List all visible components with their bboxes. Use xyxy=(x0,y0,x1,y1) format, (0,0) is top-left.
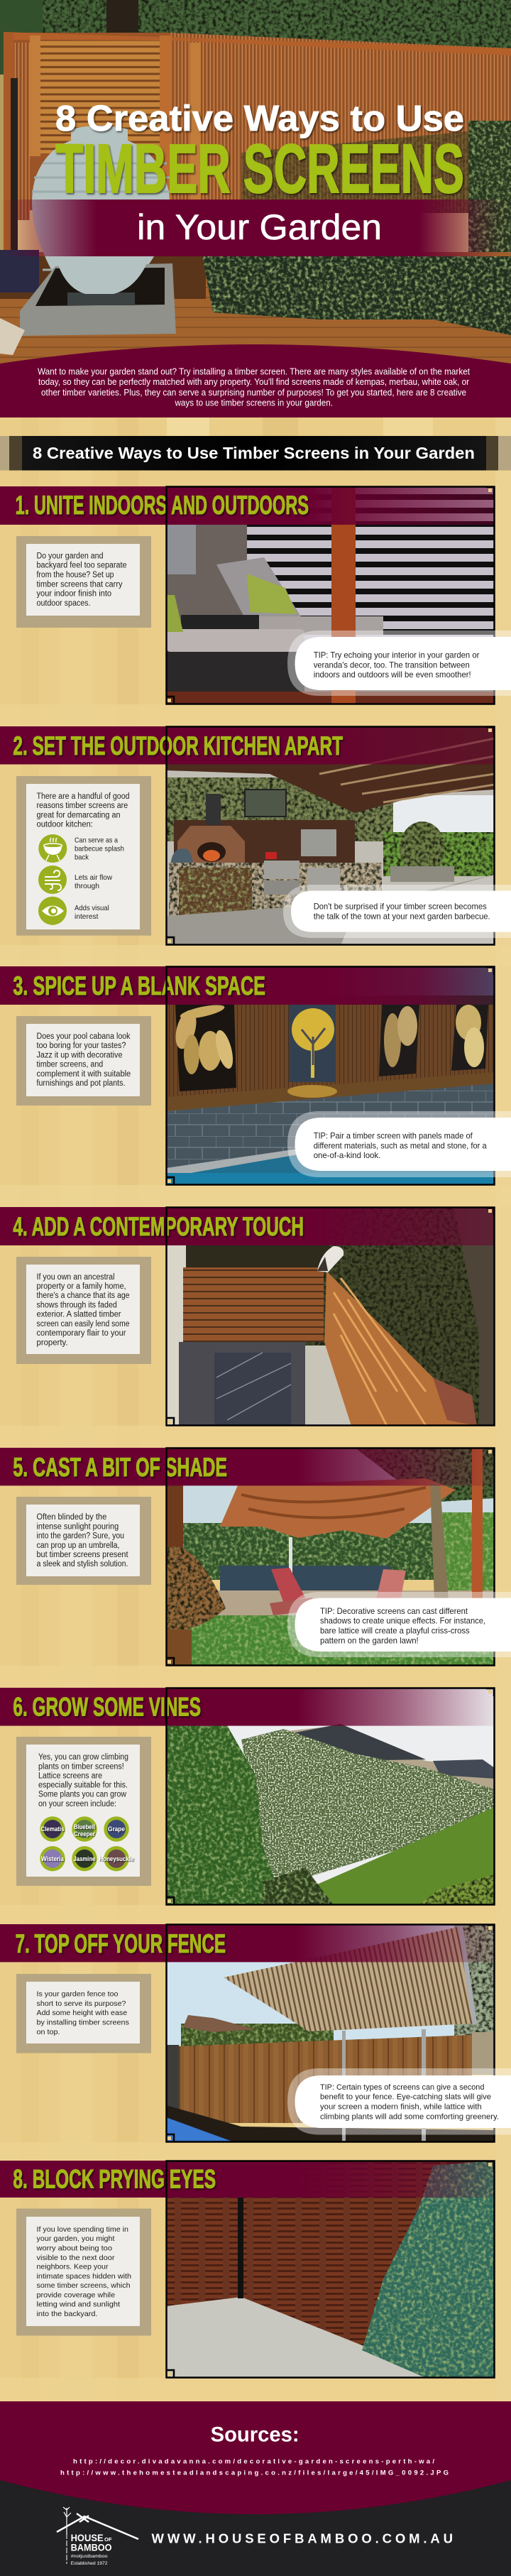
text box: but timber screens present xyxy=(37,1551,128,1559)
logo: house of bamboo xyxy=(57,2507,138,2566)
header band xyxy=(0,1924,495,1962)
text box with icons: There are a handful of good xyxy=(37,792,129,801)
photo frame xyxy=(166,1688,494,1905)
logo: house of bamboo: Established 1972 xyxy=(71,2562,108,2566)
photo frame xyxy=(166,1924,494,2142)
text box: shows through its faded xyxy=(37,1301,117,1309)
tip callout: one-of-a-kind look. xyxy=(314,1150,380,1160)
photo frame xyxy=(166,1207,494,1426)
text box: property. xyxy=(37,1339,68,1348)
text box with plant badges: on your screen include: xyxy=(38,1800,116,1808)
tip callout: climbing plants will add some comforting greenery. xyxy=(320,2113,499,2122)
tip callout xyxy=(287,631,511,696)
badge: bluebell creeper xyxy=(72,1816,97,1842)
text box with icons: Adds visual xyxy=(75,904,109,912)
tip callout xyxy=(287,2068,511,2134)
intro panel: other timber varieties. Plus, they can serve a surprising number of purposes! To get you started, here are 8 creative xyxy=(41,388,466,398)
photo: pergola over fence xyxy=(166,1924,495,2142)
subtitle bar xyxy=(0,436,511,470)
photo: outdoor kitchen xyxy=(166,726,495,945)
text box xyxy=(16,1257,151,1364)
photo frame xyxy=(166,2161,494,2378)
icon: barbecue xyxy=(38,834,67,863)
deck xyxy=(0,252,511,373)
text box: If you love spending time in xyxy=(37,2225,128,2234)
tip callout xyxy=(283,885,511,938)
lower bush xyxy=(202,256,511,335)
text box with plant badges: especially suitable for this. xyxy=(38,1781,128,1790)
header band xyxy=(0,486,495,525)
text box: visible to the next door xyxy=(37,2254,115,2262)
concrete water base xyxy=(20,263,176,336)
tip callout: TIP: Decorative screens can cast different xyxy=(320,1606,468,1616)
text box: Do your garden and xyxy=(37,552,104,560)
text box: timber screens, and xyxy=(37,1061,103,1069)
header band xyxy=(0,726,495,764)
slatted panel xyxy=(4,33,170,210)
text box: property or a family home, xyxy=(37,1282,126,1291)
text box with icons: barbecue splash xyxy=(75,845,124,853)
badge: clematis xyxy=(40,1816,65,1842)
paper xyxy=(0,318,25,355)
heading: 8. BLOCK PRYING EYES xyxy=(13,2164,216,2194)
tip callout xyxy=(287,1592,511,1657)
badge: wisteria: Wisteria xyxy=(41,1855,65,1863)
text box: Add some height with ease xyxy=(37,2009,127,2017)
logo: house of bamboo: #notjustbamboo xyxy=(71,2555,108,2559)
text box with icons: reasons timber screens are xyxy=(37,802,128,810)
bag xyxy=(0,250,39,293)
badge: grape xyxy=(104,1816,129,1842)
text box: provide coverage while xyxy=(37,2291,115,2299)
tip callout: bare lattice will create a playful criss-cross xyxy=(320,1626,470,1636)
sources panel: Sources: xyxy=(211,2423,300,2447)
text box: letting wind and sunlight xyxy=(37,2301,120,2309)
hero photo: timber screen, urn and garden xyxy=(0,0,511,373)
wood background xyxy=(0,412,511,2407)
text box: complement it with suitable xyxy=(37,1070,131,1079)
text box with icons: Can serve as a xyxy=(75,836,118,845)
tip callout: TIP: Certain types of screens can give a second xyxy=(320,2083,484,2092)
subtitle bar: 8 Creative Ways to Use Timber Screens in Your Garden xyxy=(33,444,475,462)
text box with icons: interest xyxy=(75,912,99,921)
text box: there's a chance that its age xyxy=(37,1292,129,1300)
text box: your garden, you might xyxy=(37,2234,115,2243)
sources panel: http://www.thehomesteadlandscaping.co.nz/files/large/45/IMG_0092.JPG xyxy=(60,2469,449,2477)
icon: eye xyxy=(38,897,67,925)
text box xyxy=(16,2208,151,2336)
urn lower in pool xyxy=(58,264,146,294)
photo: jasmine hedge and lawn xyxy=(166,1688,495,1905)
header band xyxy=(0,2161,495,2198)
heading: 4. ADD A CONTEMPORARY TOUCH xyxy=(13,1212,304,1241)
header band xyxy=(0,966,495,1005)
tip callout: different materials, such as metal and stone, for a xyxy=(314,1141,487,1151)
text box: furnishings and pot plants. xyxy=(37,1079,125,1088)
photo frame xyxy=(166,967,494,1185)
text box: Jazz it up with decorative xyxy=(37,1052,122,1060)
text box: exterior. A slatted timber xyxy=(37,1311,121,1319)
section 8: block prying eyes xyxy=(0,2161,495,2378)
section 6: grow some vines xyxy=(0,1688,495,1905)
header band xyxy=(0,1207,495,1245)
text box: some timber screens, which xyxy=(37,2281,131,2290)
badge: grape: Grape xyxy=(108,1825,125,1833)
intro panel xyxy=(0,344,511,417)
section 7: top off your fence xyxy=(0,1924,511,2142)
section 2: set the outdoor kitchen apart xyxy=(0,726,511,945)
text box: backyard feel too separate xyxy=(37,562,126,570)
photo frame xyxy=(166,1448,494,1666)
tip callout: indoors and outdoors will be even smoother! xyxy=(314,670,471,680)
text box: neighbors. Keep your xyxy=(37,2262,109,2271)
text box: screen can easily lend some xyxy=(37,1320,129,1328)
tip callout: the talk of the town at your next garden barbecue. xyxy=(314,911,490,921)
text box: into the garden? Sure, you xyxy=(37,1532,124,1541)
badge: honeysuckle xyxy=(99,1846,133,1871)
photo frame xyxy=(166,487,494,704)
tip callout: shadows to create unique effects. For instance, xyxy=(320,1616,485,1626)
header band xyxy=(0,1688,495,1726)
text box with icons: Lets air flow xyxy=(75,873,112,882)
section 1: unite indoors and outdoors xyxy=(0,486,511,706)
icon: wind xyxy=(38,866,67,894)
text box: worry about being too xyxy=(35,2244,112,2252)
tip callout: your screen a modern finish, while lattice with xyxy=(320,2103,482,2112)
sources panel: http://decor.divadavanna.com/decorative-garden-screens-perth-wa/ xyxy=(73,2457,434,2465)
text box: intense sunlight pouring xyxy=(37,1523,119,1532)
footer xyxy=(0,2480,511,2576)
text box: from the house? Set up xyxy=(37,571,114,579)
text box: Is your garden fence too xyxy=(37,1990,119,1999)
tip callout: TIP: Pair a timber screen with panels made of xyxy=(314,1131,473,1141)
text box: too boring for your tastes? xyxy=(37,1042,126,1050)
photo frame xyxy=(166,727,494,945)
heading: 6. GROW SOME VINES xyxy=(13,1692,201,1721)
text box xyxy=(16,536,151,628)
title: 8 Creative Ways to Use xyxy=(55,98,464,138)
text box: timber screens that carry xyxy=(37,580,123,589)
title band xyxy=(0,200,511,256)
text box with plant badges xyxy=(16,1737,151,1886)
title: in Your Garden xyxy=(137,207,382,247)
text box: Does your pool cabana look xyxy=(37,1032,131,1041)
text box: contemporary flair to your xyxy=(37,1329,126,1338)
text box with icons: through xyxy=(75,882,99,890)
sources panel xyxy=(0,2401,511,2522)
text box xyxy=(16,1974,151,2053)
heading: 7. TOP OFF YOUR FENCE xyxy=(16,1929,226,1958)
text box: into the backyard. xyxy=(37,2310,98,2318)
badge: bluebell creeper: Creeper xyxy=(74,1830,95,1838)
text box: a sleek and stylish solution. xyxy=(37,1560,128,1568)
reed fence xyxy=(170,33,511,213)
heading: 3. SPICE UP A BLANK SPACE xyxy=(13,971,265,1000)
text box: Often blinded by the xyxy=(37,1513,106,1522)
section 4: add a contemporary touch xyxy=(0,1207,495,1426)
text box: on top. xyxy=(37,2028,60,2036)
intro panel: today, so they can be perfectly matched with any property. You'll find screens made of kempas, merbau, white oak, or xyxy=(38,377,469,387)
urn xyxy=(32,126,170,268)
heading: 2. SET THE OUTDOOR KITCHEN APART xyxy=(13,731,343,760)
text box: If you own an ancestral xyxy=(37,1273,115,1282)
text box with plant badges: Lattice screens are xyxy=(38,1772,102,1780)
logo: house of bamboo: BAMBOO xyxy=(71,2542,112,2553)
logo: house of bamboo: HOUSE xyxy=(71,2533,104,2543)
bushes xyxy=(241,131,468,213)
text box xyxy=(16,1016,151,1106)
text box with icons: outdoor kitchen: xyxy=(37,821,93,829)
badge: honeysuckle: Honeysuckle xyxy=(99,1855,133,1863)
text box with icons xyxy=(16,776,151,936)
text box: intimate spaces hidden with xyxy=(37,2272,131,2281)
text box with icons: back xyxy=(75,853,89,862)
text box with plant badges: Some plants you can grow xyxy=(38,1791,127,1799)
text box with plant badges: Yes, you can grow climbing xyxy=(38,1753,128,1762)
fence frame xyxy=(4,32,511,55)
website: WWW.HOUSEOFBAMBOO.COM.AU xyxy=(152,2531,453,2546)
text box: short to serve its purpose? xyxy=(37,1999,126,2008)
heading: 1. UNITE INDOORS AND OUTDOORS xyxy=(16,491,309,520)
badge: jasmine: Jasmine xyxy=(74,1855,95,1863)
tip callout: Don't be surprised if your timber screen becomes xyxy=(314,901,487,911)
text box xyxy=(16,1497,151,1585)
tip callout: benefit to your fence. Eye-catching slats will give xyxy=(320,2093,491,2102)
tip callout xyxy=(287,1111,511,1177)
intro panel: Want to make your garden stand out? Try installing a timber screen. There are many styles available of on the market xyxy=(38,366,470,376)
logo: house of bamboo: OF xyxy=(104,2538,112,2543)
photo: decorative metal panels xyxy=(166,966,495,1185)
photo: lattice wall and conifer xyxy=(166,2161,495,2378)
tip callout: pattern on the garden lawn! xyxy=(320,1636,419,1646)
tip callout: TIP: Try echoing your interior in your garden or xyxy=(314,650,479,660)
text box: by installing timber screens xyxy=(37,2018,129,2026)
badge: bluebell creeper: Bluebell xyxy=(74,1823,95,1831)
text box: can prop up an umbrella, xyxy=(37,1541,119,1550)
heading: 5. CAST A BIT OF SHADE xyxy=(13,1453,227,1482)
intro panel: ways to use timber screens in your garden. xyxy=(175,398,333,408)
badge: clematis: Clematis xyxy=(41,1825,64,1833)
text box with plant badges: plants on timber screens! xyxy=(38,1762,124,1771)
left wall xyxy=(0,75,4,250)
header band xyxy=(0,1448,495,1485)
tip callout: veranda's decor, too. The transition between xyxy=(314,660,470,670)
text box: outdoor spaces. xyxy=(37,599,91,608)
text box with icons: great for demarcating an xyxy=(37,812,121,820)
section 3: spice up a blank space xyxy=(0,966,511,1185)
text box: your indoor finish into xyxy=(37,589,111,598)
photo: reed shade sail xyxy=(166,1448,495,1666)
badge: jasmine xyxy=(72,1846,97,1871)
photo: lounge and white slats xyxy=(166,486,495,706)
section 5: cast a bit of shade xyxy=(0,1448,511,1666)
photo: slatted fence with kookaburra xyxy=(166,1207,495,1426)
trees xyxy=(43,0,511,48)
badge: wisteria xyxy=(40,1846,65,1871)
title xyxy=(55,98,464,247)
